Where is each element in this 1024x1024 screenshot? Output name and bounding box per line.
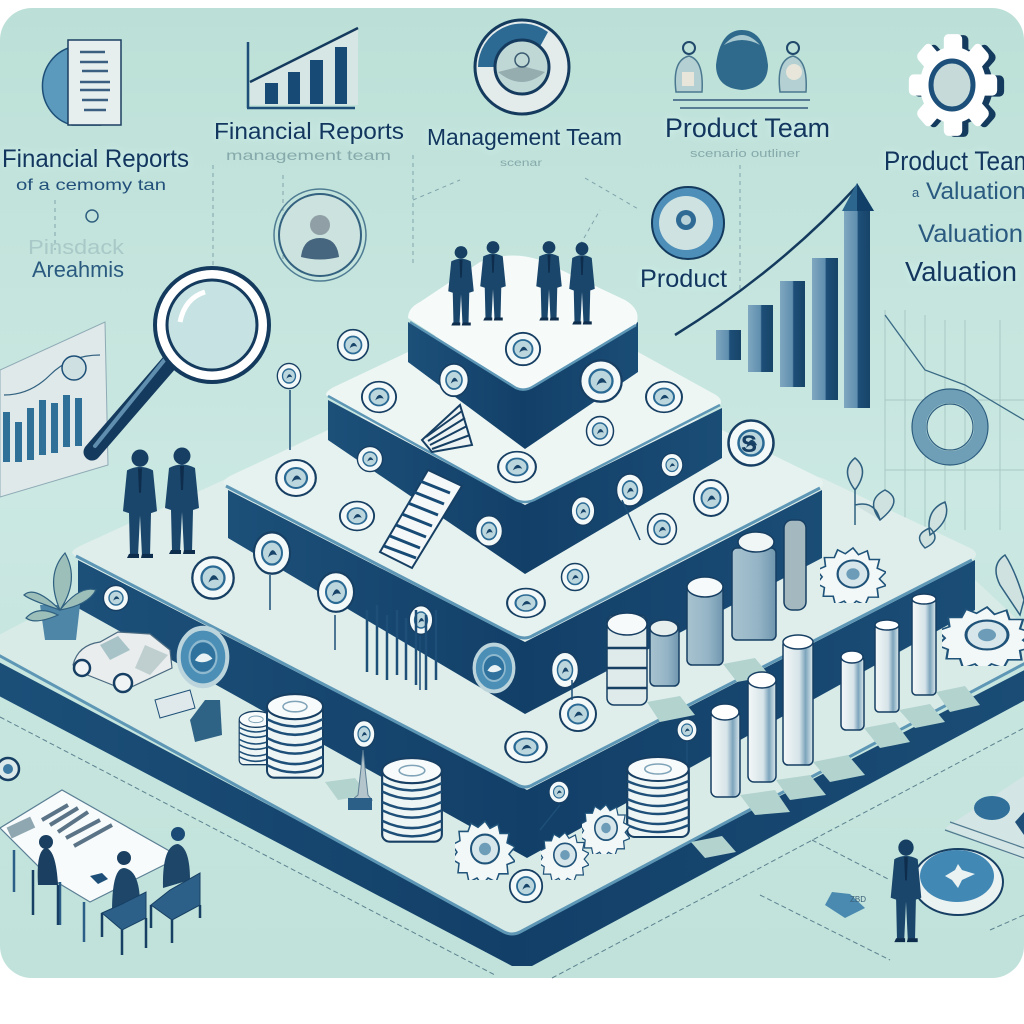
pyramid tier 1: base xyxy=(0,580,1024,966)
icon: car xyxy=(73,632,172,692)
floor guide lines xyxy=(0,717,1024,978)
icon: trophy spire xyxy=(348,750,372,810)
columns: tier 3 row xyxy=(607,520,806,705)
heading: right column labels: Valuation xyxy=(905,256,1017,287)
figures: two advisers on tier 2 xyxy=(123,448,199,558)
heading: Product Team top xyxy=(665,113,830,160)
heading: Financial Reports left: Pinsdack xyxy=(28,237,125,259)
icon: left edge small disc xyxy=(0,758,19,780)
panel: left report sheet xyxy=(0,322,108,497)
table legs xyxy=(14,850,84,942)
icon: letter badge S: S xyxy=(741,431,757,458)
heading: Financial Reports left xyxy=(2,145,189,282)
icon: potted plant xyxy=(24,553,96,640)
heading: Financial Reports centre: management team xyxy=(226,147,391,163)
icons: coin badges on tiers xyxy=(103,330,773,902)
meeting table with team xyxy=(0,790,200,955)
pyramid tier 5: summit xyxy=(408,255,638,449)
shadows beneath columns xyxy=(325,658,980,858)
icon: stair small xyxy=(422,405,472,452)
heading: Product: Product xyxy=(640,265,727,293)
faint guide lines upper xyxy=(55,155,740,290)
panel: right grid chart xyxy=(885,310,1024,530)
icon: stair large xyxy=(380,470,462,568)
chart: barcode columns xyxy=(367,605,436,690)
pyramid tier 2 xyxy=(72,440,976,858)
heading: Financial Reports centre xyxy=(214,118,404,163)
figure: analyst with star coin xyxy=(891,839,1003,942)
pyramid tier 4 xyxy=(326,310,722,574)
icon: person circle xyxy=(274,189,366,281)
attendee and chair right xyxy=(151,827,200,943)
heading: Financial Reports left: Areahmis xyxy=(32,257,124,282)
heading: Management Team: Management Team xyxy=(427,124,622,150)
heading: Financial Reports left: Financial Reports xyxy=(2,145,189,173)
heading: Product Team top: Product Team xyxy=(665,113,830,143)
heading: right column labels: Valuation xyxy=(918,220,1023,248)
figures: leadership team on summit xyxy=(448,241,595,326)
heading: right column labels: Valuation xyxy=(926,178,1024,205)
heading: Financial Reports left: of a cemomy tan xyxy=(16,177,166,194)
icons: coin stacks xyxy=(239,694,689,842)
icon: magnifying glass xyxy=(92,268,269,452)
icon: rising bar chart xyxy=(247,28,358,108)
icon: corner document xyxy=(945,776,1024,860)
heading: right column labels xyxy=(884,146,1024,287)
pyramid tier 3 xyxy=(224,380,823,714)
icon: floor marker xyxy=(825,892,866,918)
attendee and chair left xyxy=(33,835,58,925)
heading: right column labels: a xyxy=(912,185,920,200)
heading: Financial Reports centre: Financial Reports xyxy=(214,118,404,144)
icon: financial document xyxy=(42,40,121,125)
columns: tier 2 row xyxy=(711,594,936,797)
heading: Management Team xyxy=(427,124,622,169)
icons: badge stems xyxy=(270,390,687,830)
icon: ornament on tier 2 xyxy=(155,690,222,742)
icons: gears xyxy=(452,548,1024,885)
icon: floor marker: ZBD xyxy=(850,895,866,904)
icon: product team group xyxy=(673,30,810,108)
icons: leaf ornaments on tier 2 right xyxy=(848,458,1024,615)
icon: donut chart xyxy=(475,20,569,114)
icon: gear xyxy=(909,34,1004,137)
heading: Management Team: scenar xyxy=(500,158,543,169)
attendee and chair centre xyxy=(102,851,146,955)
heading: Product Team top: scenario outliner xyxy=(690,148,800,160)
table top with report xyxy=(0,790,180,902)
icon: product disc xyxy=(652,187,724,259)
chart: rising value bars xyxy=(675,183,874,408)
